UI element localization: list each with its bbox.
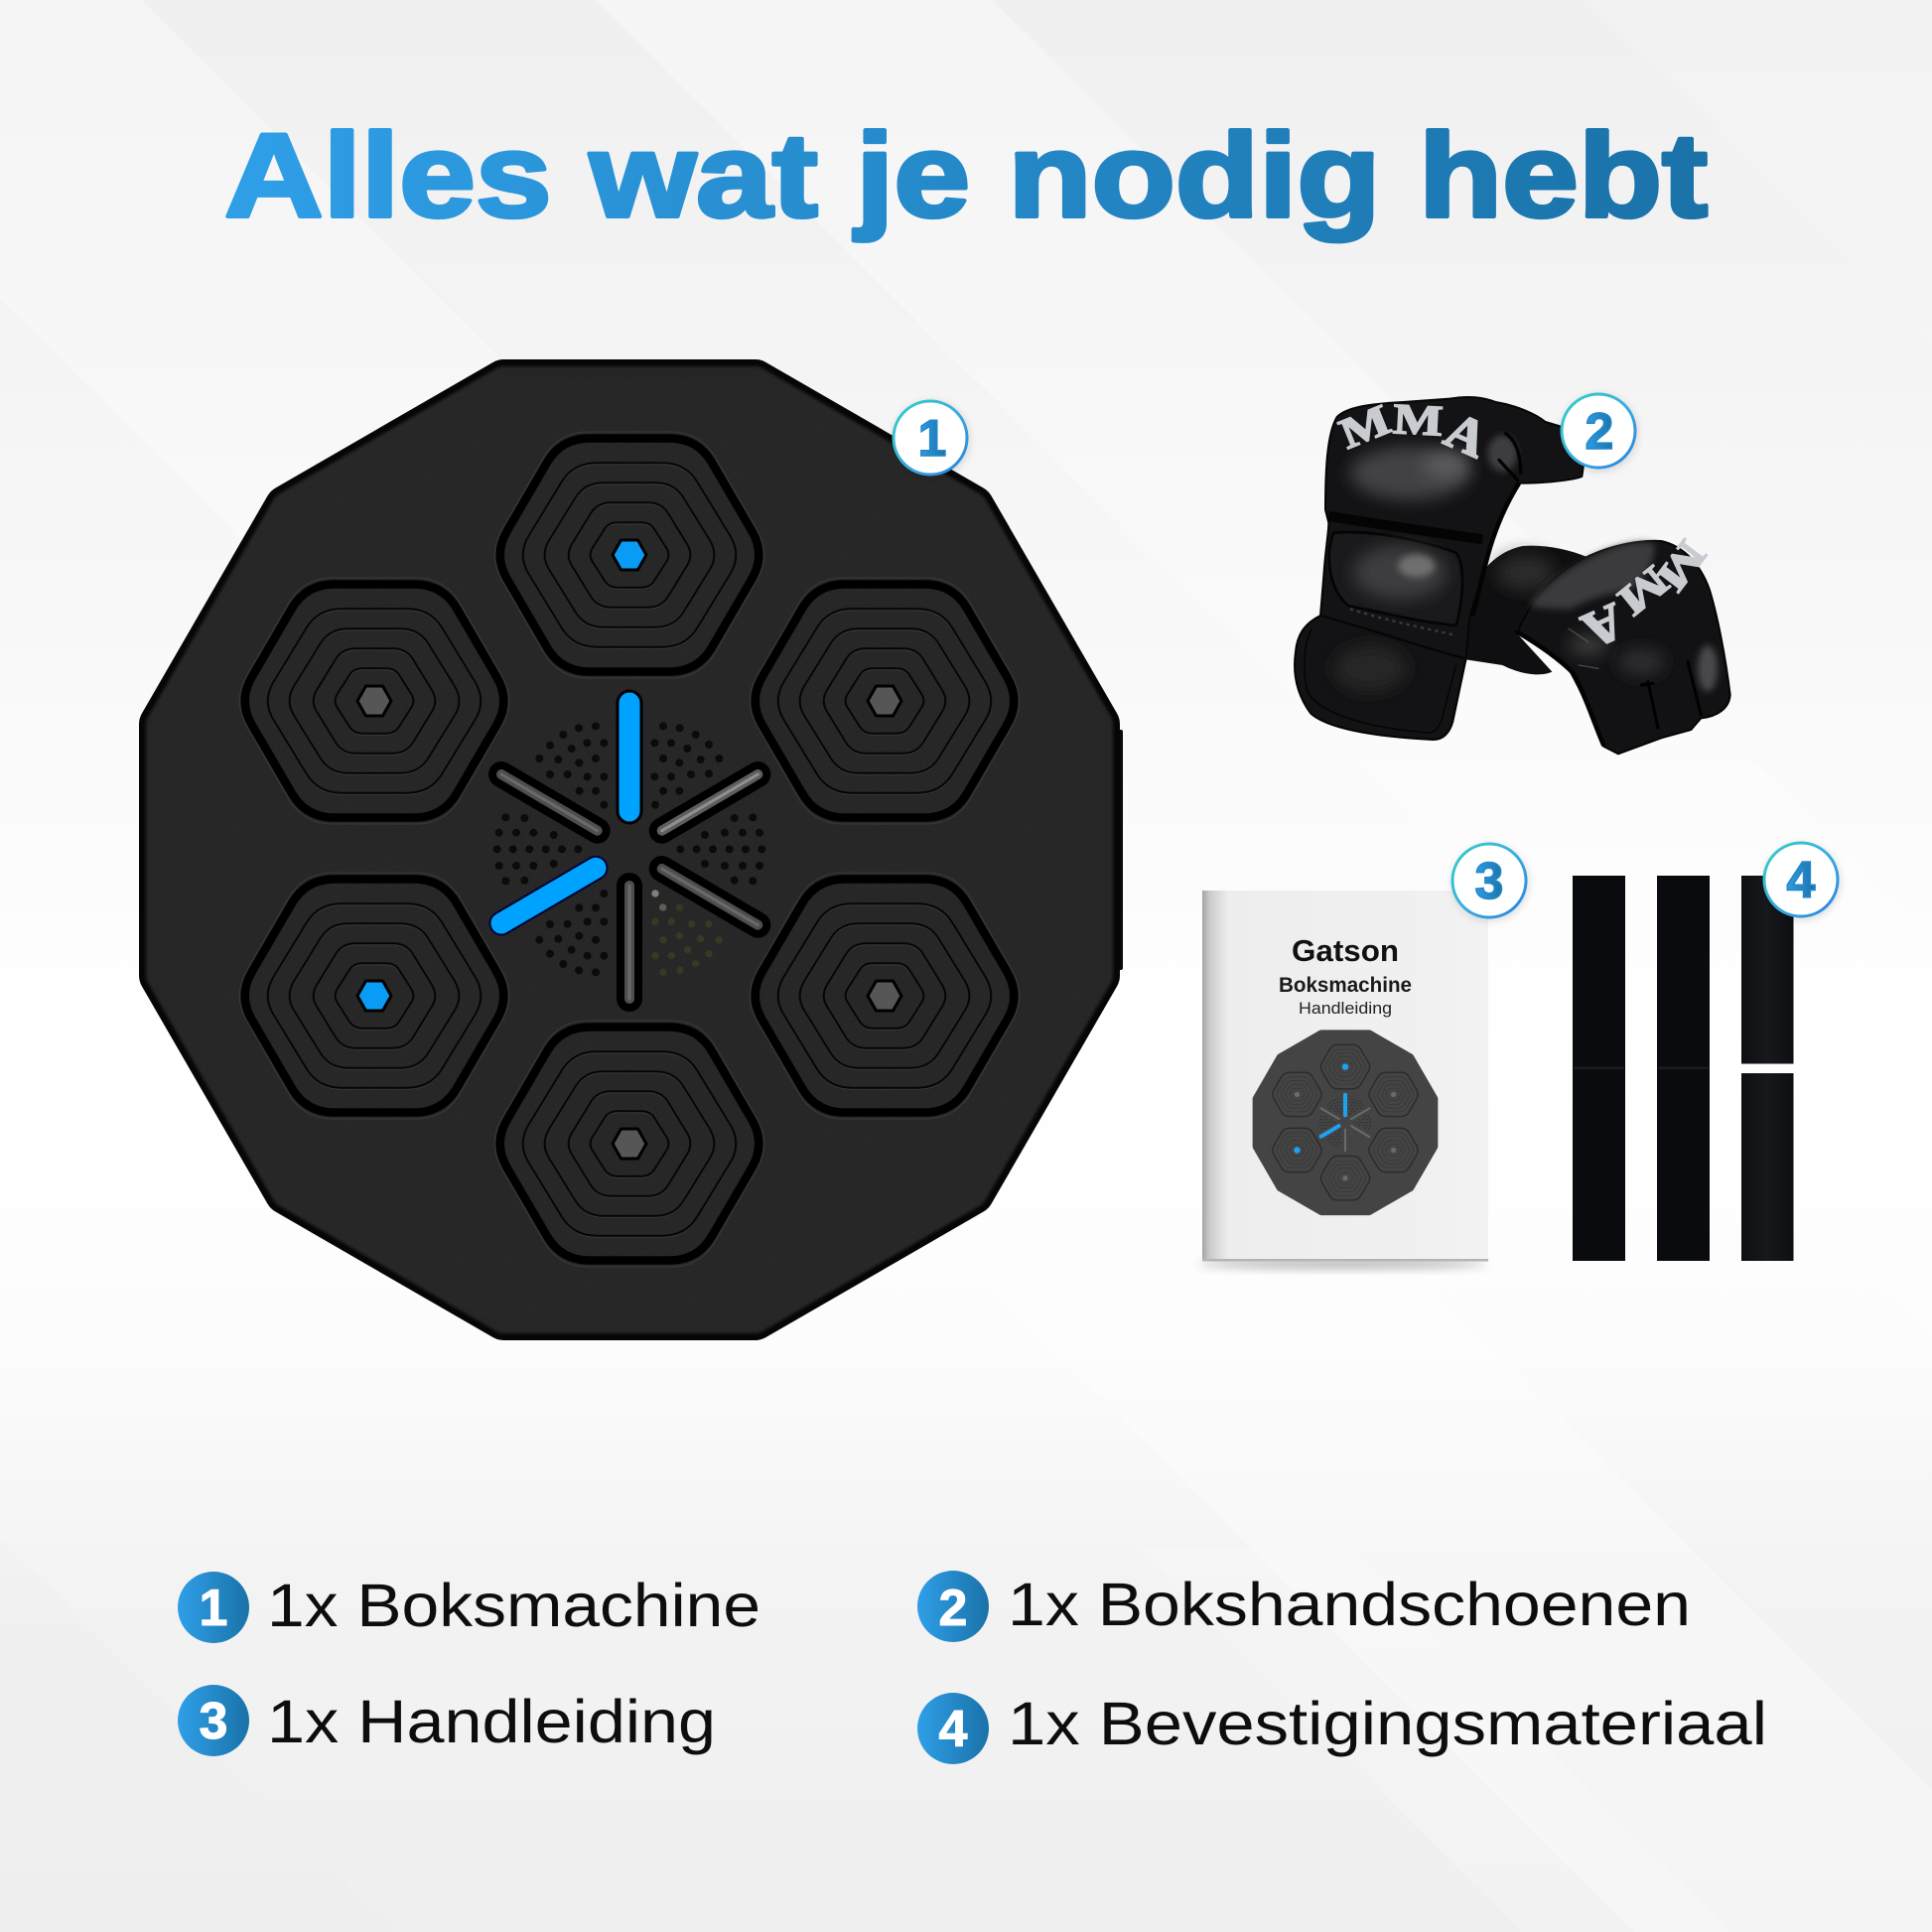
glove text: MMA back: A [1437, 402, 1495, 469]
panel: boxing machine [161, 381, 1123, 1318]
panel: boxing gloves [1295, 395, 1730, 754]
manual subtitle: Handleiding [1299, 999, 1392, 1018]
manual title: Boksmachine [1279, 974, 1412, 997]
title: Alles wat je nodig hebt [224, 109, 1708, 242]
pad: lower right [750, 873, 1020, 1119]
glove text: MMA front: A [1575, 592, 1632, 659]
strap 3 lower piece [1741, 1073, 1793, 1261]
badge 3: 3 [1475, 853, 1503, 910]
badge 1 [894, 401, 967, 475]
speaker dots [493, 722, 765, 976]
pad: upper left [239, 578, 509, 824]
pad: upper right [750, 578, 1020, 824]
pad: top (lit) [494, 432, 764, 678]
strap 2 [1657, 876, 1710, 1261]
list item 4: 4 [939, 1701, 968, 1758]
panel: manual booklet [1198, 891, 1488, 1269]
badge 2: 2 [1586, 403, 1613, 461]
list item 1: 1x Boksmachine [267, 1572, 760, 1639]
list item 3: 1x Handleiding [267, 1688, 716, 1755]
badge 4: 4 [1787, 852, 1816, 909]
glove: front glove [1517, 532, 1730, 754]
pad: lower left (lit) [239, 873, 509, 1119]
list item 3: 3 [200, 1693, 227, 1750]
list item 2: 2 [939, 1580, 967, 1637]
badge 1: 1 [918, 410, 946, 468]
glove text: MMA front: M [1609, 557, 1677, 624]
centre light bars [501, 703, 758, 999]
glove text: MMA back: M [1392, 395, 1444, 445]
badge 4 [1764, 843, 1838, 916]
manual machine illustration [1257, 1034, 1434, 1211]
glove: back glove [1295, 395, 1584, 740]
list item 4: 1x Bevestigingsmateriaal [1008, 1690, 1767, 1757]
glove text: MMA back [1333, 395, 1495, 469]
strap 3 upper piece [1741, 876, 1793, 1064]
glove text: MMA back: M [1333, 396, 1397, 458]
panel: mounting straps [1573, 876, 1793, 1261]
list item 1: 1 [200, 1580, 227, 1637]
strap 1 [1573, 876, 1625, 1261]
glove: rear palm [1459, 546, 1588, 674]
list item 2: 1x Bokshandschoenen [1008, 1571, 1691, 1638]
glove text: MMA front: M [1647, 532, 1715, 600]
manual brand: Gatson [1292, 933, 1399, 968]
pad: bottom [494, 1021, 764, 1267]
glove text: MMA front [1575, 532, 1715, 659]
badge 3 [1452, 844, 1526, 917]
badge 2 [1562, 394, 1635, 468]
